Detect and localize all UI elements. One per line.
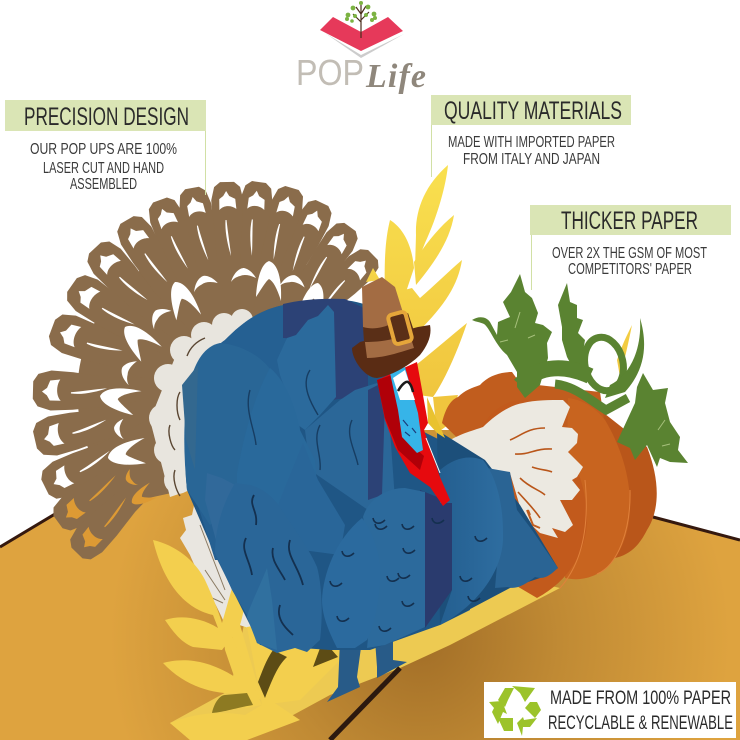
- small cone: [265, 443, 345, 555]
- green vines and leaves: [472, 274, 688, 467]
- callout: thicker paper: COMPETITORS' PAPER: [568, 261, 692, 278]
- legs: [327, 640, 362, 702]
- red wattle: [377, 362, 450, 506]
- back dome: [187, 303, 300, 560]
- badge: recyclable paper: [484, 682, 736, 738]
- callout: precision design: ASSEMBLED: [70, 176, 137, 193]
- inner scalloped white wing behind body: [149, 309, 280, 497]
- callout: thicker paper: [530, 205, 731, 290]
- logo: pop life: Life: [365, 58, 426, 95]
- icon: open red book: [320, 17, 403, 51]
- feather marks: [244, 370, 487, 635]
- back yellow leaves: [366, 165, 632, 433]
- callout: precision design: OUR POP UPS ARE 100%: [30, 141, 177, 158]
- icon: tree: [345, 1, 377, 38]
- dark red wattle: [377, 375, 424, 470]
- centre crease: [330, 668, 400, 740]
- right mid lobe: [305, 383, 395, 510]
- centre cone: [237, 368, 320, 545]
- white wing over pumpkin: [450, 400, 583, 538]
- tail fan: [31, 180, 384, 565]
- body base: [185, 300, 470, 650]
- callout: quality materials: [431, 95, 631, 177]
- front yellow leaves: [153, 540, 370, 740]
- right curl: [605, 318, 644, 398]
- beak: [427, 397, 445, 438]
- blue face: [390, 367, 423, 453]
- callout: precision design: [5, 100, 206, 195]
- logo: pop life: [296, 1, 426, 95]
- middle leaf: [558, 283, 590, 372]
- rear small wing: [205, 473, 235, 555]
- curl ring: [580, 334, 628, 394]
- turkey head: [377, 362, 450, 506]
- right front lobe: [363, 488, 425, 648]
- callout: precision design: LASER CUT AND HAND: [43, 160, 164, 177]
- left front wing lobe: [215, 483, 322, 653]
- left dome lobe: [184, 343, 300, 525]
- right leaf: [617, 373, 688, 467]
- logo: pop life: POP: [296, 52, 364, 93]
- yellow platform under the turkey: [170, 560, 560, 740]
- centre front lobe: [322, 518, 380, 648]
- right front outer lobe: [440, 457, 503, 625]
- callout: precision design: PRECISION DESIGN: [24, 103, 189, 131]
- icon: open book shadow: [325, 33, 404, 58]
- pumpkin: [442, 372, 657, 598]
- serrated centre lobe: [277, 305, 336, 430]
- eye: [398, 382, 413, 392]
- navy back panel: [283, 299, 368, 400]
- callout: quality materials: QUALITY MATERIALS: [444, 97, 622, 125]
- right side dark panel: [437, 430, 558, 625]
- white eye patch: [393, 370, 415, 400]
- callout: quality materials: MADE WITH IMPORTED PAPER: [448, 134, 615, 151]
- left leaf and curl: [472, 274, 552, 398]
- lower stem: [555, 384, 628, 410]
- pilgrim hat: [352, 277, 431, 378]
- floor of the open card: [0, 430, 740, 740]
- callout: quality materials: FROM ITALY AND JAPAN: [463, 151, 600, 168]
- navy front strip: [420, 490, 452, 628]
- lower-left white wing: [180, 499, 265, 632]
- turkey body: [182, 299, 558, 702]
- icon: recycle symbol: [489, 686, 541, 736]
